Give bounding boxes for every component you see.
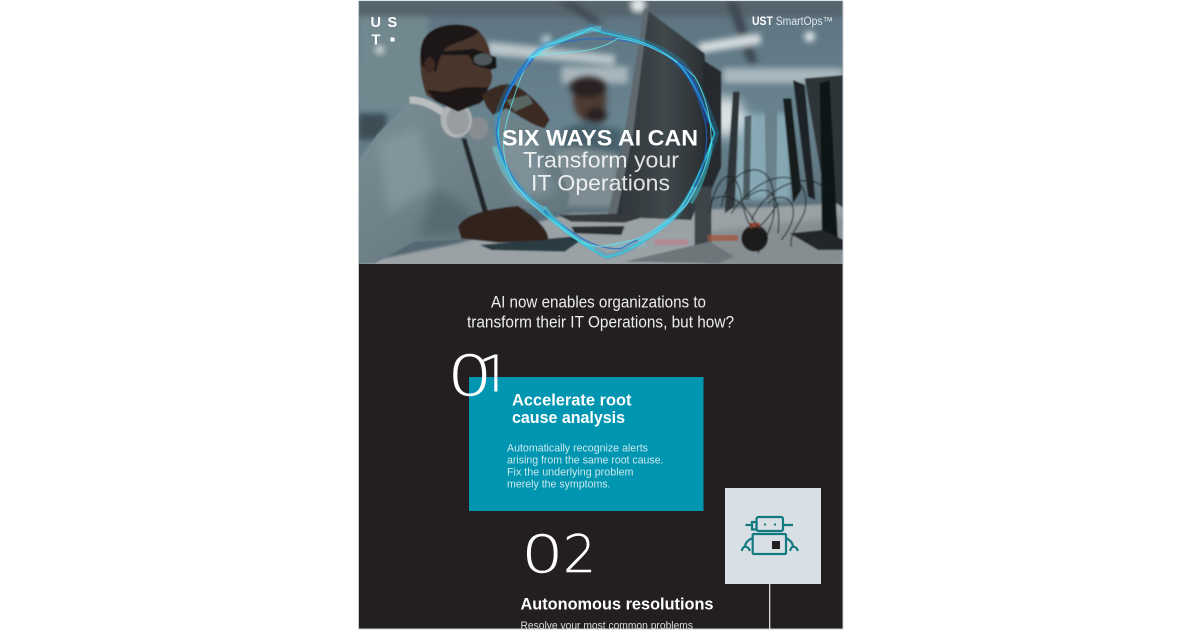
head: [419, 25, 498, 102]
number 01: [453, 354, 498, 396]
card body text: Fix the underlying problem: [507, 466, 634, 478]
desk: [358, 203, 844, 267]
number 02: [521, 525, 596, 585]
logo: UST: [371, 17, 397, 44]
robot: [742, 517, 798, 554]
card body text: arising from the same root cause.: [507, 454, 664, 466]
card heading: Accelerate root: [512, 390, 632, 410]
cables: [710, 170, 825, 253]
panel: hero photo: [358, 0, 844, 267]
page frame: [358, 0, 844, 630]
card body text: merely the symptoms.: [507, 478, 610, 490]
lanyard: [461, 138, 489, 213]
hand on chin: [482, 84, 550, 128]
headphones: [410, 100, 446, 115]
panel: step 2 text: [520, 598, 713, 628]
card heading: cause analysis: [512, 408, 625, 427]
number 02: 0: [521, 525, 563, 585]
hero title: IT Operations: [531, 170, 670, 196]
hero title: Transform your: [523, 148, 679, 172]
number 01: 0: [447, 345, 493, 409]
hero title: [502, 126, 698, 196]
man shirt: [358, 98, 570, 263]
intro text: transform their IT Operations, but how?: [467, 314, 734, 332]
number 01: 1: [478, 344, 512, 408]
office background: [358, 0, 844, 200]
graphic: glowing wave ring: [495, 27, 716, 257]
panel: step 1 card: [469, 377, 704, 511]
number 02: 2: [563, 525, 596, 585]
intro text: [467, 294, 734, 332]
logo: UST: S: [388, 15, 398, 31]
intro text: AI now enables organizations to: [491, 294, 706, 312]
card body text: Automatically recognize alerts: [507, 442, 648, 454]
hero title: SIX WAYS AI CAN: [502, 126, 698, 150]
card heading: [512, 390, 632, 427]
card body text: [507, 442, 664, 490]
monitors: [480, 8, 844, 263]
logo: UST: U: [370, 15, 381, 31]
logo: UST: T: [372, 32, 380, 48]
lower hand: [458, 206, 548, 243]
logo: UST SmartOps: UST SmartOps™: [752, 16, 833, 28]
icon: robot tile: [725, 488, 821, 584]
connector line: [769, 584, 770, 629]
step 2 heading: Autonomous resolutions: [520, 594, 714, 614]
background colleague: [555, 72, 623, 208]
panel: dark content background: [359, 264, 842, 628]
